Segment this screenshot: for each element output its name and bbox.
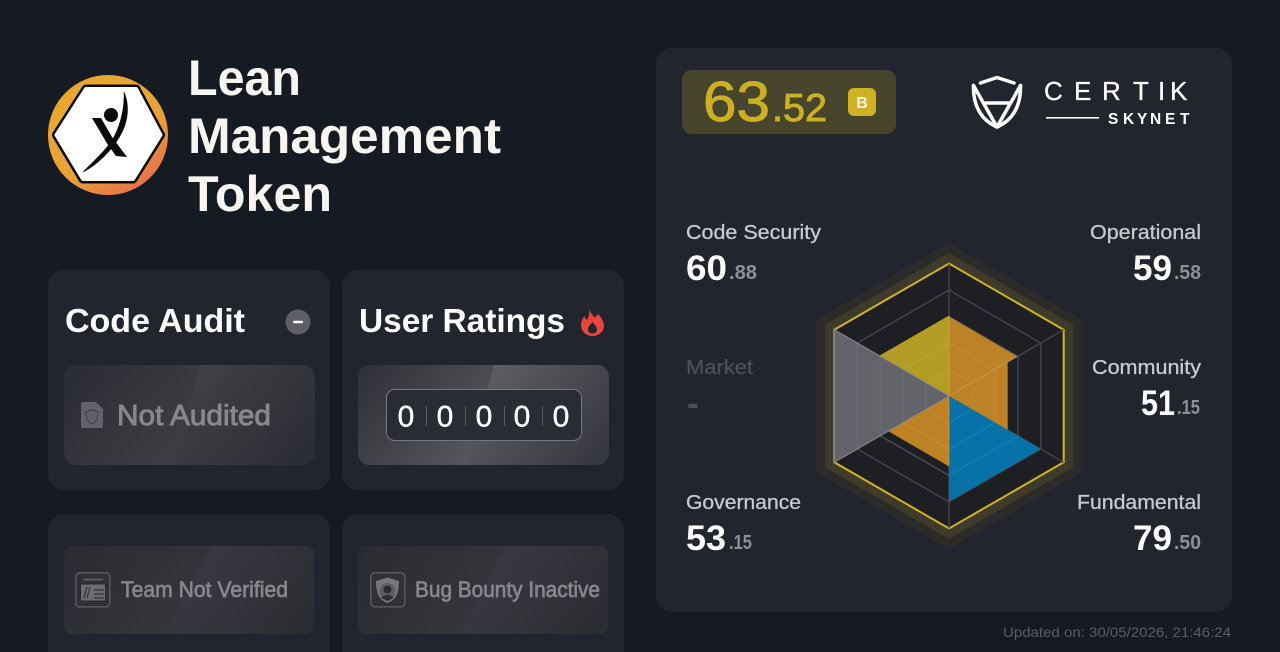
score value: 63 xyxy=(703,70,770,134)
segment: fundamental xyxy=(949,396,1041,502)
rating counter: 0 xyxy=(437,400,453,434)
text: bug bounty inactive: Bug Bounty Inactive xyxy=(415,577,600,602)
badge: bug bounty inactive xyxy=(358,546,608,634)
panel: skynet score xyxy=(656,48,1232,612)
badge: team not verified xyxy=(64,546,314,634)
segment: community xyxy=(949,362,1008,430)
metric: code security: .88 xyxy=(729,262,757,284)
icon: audit document xyxy=(81,402,103,428)
heading: user ratings: User Ratings xyxy=(359,302,565,339)
metric: fundamental xyxy=(1077,491,1201,558)
metric: operational: .58 xyxy=(1174,262,1201,284)
icon: minus status xyxy=(286,310,310,334)
panel: bug bounty xyxy=(342,514,624,652)
rating counter: 0 xyxy=(553,400,569,434)
metric: operational xyxy=(1090,221,1201,288)
logo: certik skynet: SKYNET xyxy=(1108,111,1190,128)
title: Lean xyxy=(188,50,301,106)
text: not audited: Not Audited xyxy=(117,400,271,432)
segment: operational xyxy=(949,316,1017,396)
panel: team verification xyxy=(48,514,330,652)
metric: code security xyxy=(686,221,822,288)
token logo xyxy=(48,75,168,195)
segment: code security xyxy=(879,316,949,396)
grade B: B xyxy=(856,95,868,112)
metric: governance: .15 xyxy=(729,532,752,554)
metric: fundamental: .50 xyxy=(1174,532,1201,554)
logo: certik skynet: CERTIK xyxy=(1044,76,1188,106)
rating counter xyxy=(358,365,609,465)
title: Token xyxy=(188,166,332,222)
grade B xyxy=(848,88,876,116)
metric: community: .15 xyxy=(1177,397,1200,419)
metric: community: Community xyxy=(1092,356,1202,379)
metric: governance: Governance xyxy=(686,491,801,514)
metric: operational: Operational xyxy=(1090,221,1201,244)
metric: market: Market xyxy=(686,356,753,379)
icon: flame xyxy=(581,308,604,336)
text: team not verified: Team Not Verified xyxy=(121,577,288,602)
metric: community: 51 xyxy=(1141,384,1175,423)
segment: governance xyxy=(888,396,949,466)
updated timestamp: Updated on: 30/05/2026, 21:46:24 xyxy=(1003,624,1231,640)
icon: bounty shield xyxy=(371,573,405,607)
metric: market xyxy=(686,356,753,423)
metric: governance: 53 xyxy=(686,519,726,558)
icon: team id card xyxy=(76,573,110,607)
metric: code security: 60 xyxy=(686,249,727,288)
radar chart xyxy=(816,243,1082,549)
panel: user ratings xyxy=(342,270,624,490)
metric: fundamental: Fundamental xyxy=(1077,491,1201,514)
metric: code security: Code Security xyxy=(686,221,822,244)
metric: community xyxy=(1092,356,1202,423)
heading: code audit: Code Audit xyxy=(65,302,245,339)
rating counter: 0 xyxy=(514,400,530,434)
logo: certik skynet xyxy=(973,76,1190,128)
rating counter: 0 xyxy=(476,400,492,434)
badge: not audited xyxy=(64,365,315,465)
title xyxy=(188,50,501,222)
panel: code audit xyxy=(48,270,330,490)
score value: .52 xyxy=(772,87,827,130)
score badge xyxy=(682,70,896,134)
title: Management xyxy=(188,108,501,164)
metric: governance xyxy=(686,491,801,558)
segment: market xyxy=(834,330,949,462)
score value xyxy=(703,70,827,134)
rating counter: 0 xyxy=(398,400,414,434)
metric: market: - xyxy=(687,384,699,423)
metric: fundamental: 79 xyxy=(1133,519,1172,558)
metric: operational: 59 xyxy=(1133,249,1172,288)
